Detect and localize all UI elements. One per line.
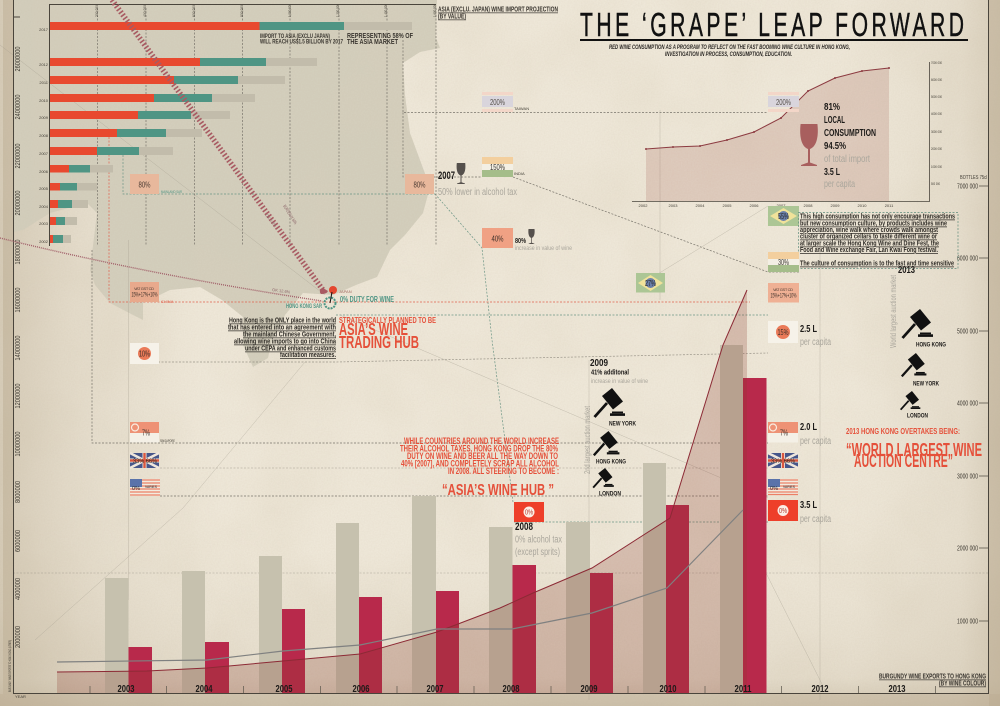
left axis labels: 8000000 (15, 481, 22, 503)
left axis labels: 26000000 (15, 46, 22, 72)
chart caption: Burgundy wine exports (879, 674, 986, 688)
flag: Hong Kong 2008 (514, 502, 544, 522)
chart: local consumption area: 2000 000 (931, 146, 943, 151)
chart: Asia wine import projection bars: 200,000 (94, 4, 99, 17)
bottom chart: Burgundy wine exports: 2007 (426, 683, 444, 695)
flag: Taiwan 200% left: TAIWAN (514, 106, 529, 111)
flag: USA right: VARIES (783, 484, 795, 489)
left axis labels: 6000000 (15, 530, 22, 552)
callout: 2009 additional increase: 41% additonal (591, 370, 629, 376)
chart: Asia wine import projection bars: 2010 (39, 98, 49, 103)
map of China coastline (14, 0, 440, 367)
text: countries increase alcohol taxes: 40% [2007], AND COMPLETELY SCRAP ALL ALCOHOL (401, 458, 559, 468)
Hong Kong marker: HONG KONG SAR (286, 304, 322, 310)
flag: Taiwan 200% right (768, 92, 799, 112)
chart: Asia wine import projection bars: 2005 (39, 186, 49, 191)
subtitle: INVESTIGATION IN PROCESS, CONSUMPTION, EDUCATION. (665, 51, 792, 58)
text: Hong Kong CEPA agreement: under CEPA and enhanced customs (245, 344, 336, 352)
flag: Hong Kong 80% right (405, 174, 434, 194)
flag: Singapore right with 2.0 L per capita (768, 421, 831, 447)
gavels 2013 ranking: LONDON (907, 412, 928, 420)
gavels 2013 ranking: HONG KONG (916, 342, 946, 348)
left axis labels: 10000000 (15, 431, 22, 456)
right axis labels (957, 175, 988, 626)
local consumption stats: 81% (824, 101, 841, 113)
flag: Brazil 27%: 27% (645, 279, 656, 288)
chart annotation: import to Asia: REPRESENTING 58% OF (347, 31, 413, 40)
flag: Japan 10% (130, 343, 159, 364)
flag: India 150%: INDIA (514, 171, 525, 176)
flag: Hong Kong 80% right: 80% (414, 180, 426, 190)
callout: 2013 year: 2013 (898, 264, 915, 276)
flag: China taxes left: 15%+17%+10% (132, 292, 158, 298)
local consumption stats: 94.5% (824, 140, 846, 152)
chart heading: wine import projection: ASIA (EXCLU. JAPAN) WINE IMPORT PROJECTION (438, 6, 558, 14)
left axis labels: YEAR (15, 694, 26, 699)
bottom chart: Burgundy wine exports (57, 290, 936, 695)
bottom chart: Burgundy wine exports: 2006 (352, 683, 370, 695)
flag: UK left (130, 453, 159, 468)
gavels 2013 ranking: NEW YORK (913, 380, 939, 388)
Hong Kong marker: JAPAN (339, 289, 352, 294)
right axis labels: 1000 000 (957, 618, 978, 626)
right axis labels: BOTTLES 75cl (960, 175, 987, 181)
right axis labels: 4000 000 (957, 400, 978, 408)
left axis labels: 12000000 (15, 383, 22, 408)
label: world largest auction market: World largest auction market (888, 275, 898, 348)
callout: 2008 zero alcohol tax (515, 521, 562, 558)
bottom chart: Burgundy wine exports: 2013 (888, 683, 906, 695)
gavels 2009 ranking (593, 388, 636, 498)
flag: USA left: 0% (132, 486, 140, 492)
flag: Japan 10%: 10% (139, 350, 150, 358)
flag: Brazil 55% (768, 206, 799, 226)
chart: Asia wine import projection bars: 2004 (39, 204, 49, 209)
flag: Japan 15% with 2.5 L per capita: 15% (778, 328, 788, 337)
text: countries increase alcohol taxes: IN 2008. ALL STEERING TO BECOME : (448, 466, 559, 476)
chart: local consumption area: 2005 (723, 203, 732, 208)
left axis labels (7, 46, 26, 699)
chart: Asia wine import projection bars: 2009 (39, 115, 49, 120)
heading: Asia's wine trading hub (339, 315, 436, 352)
chart annotation: import to Asia: THE ASIA MARKET (347, 37, 398, 46)
heading: Asia's wine trading hub: STRATEGICALLY PLANNED TO BE (339, 315, 436, 325)
flag: Japan 15% with 2.5 L per capita (768, 321, 831, 348)
left axis labels: 14000000 (15, 335, 22, 360)
chart: Asia wine import projection bars: 2002 (39, 239, 49, 244)
flag: Taiwan 200% left (482, 92, 529, 112)
chart: local consumption area: 2002 (639, 203, 648, 208)
bottom chart: Burgundy wine exports: 2003 (118, 683, 135, 695)
callout: 80% increase in value of wine: increase in value of wine (515, 245, 572, 252)
chart: local consumption area: 6000 000 (931, 77, 943, 82)
gavels 2009 ranking: LONDON (599, 490, 621, 498)
chart: local consumption area: 5000 000 (931, 94, 943, 99)
heading: Asia's wine trading hub: TRADING HUB (339, 332, 419, 352)
flag: 40%: 40% (492, 234, 504, 244)
chart: Asia wine import projection bars: 2007 (39, 151, 49, 156)
flag: Japan 15% with 2.5 L per capita: 2.5 L (800, 323, 817, 335)
flag: Hong Kong 0% with 3.5 L per capita (768, 499, 831, 525)
text box: consumption culture: Food and Wine exchange Fair, Lan Kwai Fong festival. (800, 245, 938, 254)
text: Hong Kong CEPA agreement: that has entered into an agreement with (228, 322, 336, 332)
local consumption stats: 3.5 L (824, 166, 840, 178)
subtitle (609, 44, 850, 58)
flag: India 150% (482, 157, 525, 177)
flag: UK right (768, 453, 798, 468)
flag: Hong Kong 2008: 0% (525, 510, 533, 516)
flag: Singapore left: SINGAPORE (160, 438, 175, 443)
flag: Singapore right with 2.0 L per capita: 7% (780, 428, 788, 438)
trade routes to Hong Kong: OK 12.6% (272, 287, 291, 295)
text box: consumption culture (798, 212, 958, 268)
gavels 2009 ranking: NEW YORK (609, 420, 636, 428)
gavels 2013 ranking (901, 309, 946, 420)
heading: world largest wine auction centre (846, 426, 982, 471)
callout: 2009 additional increase (590, 357, 648, 385)
trade routes to Hong Kong: OK 5.6% (264, 213, 278, 229)
chart: local consumption area: 4000 000 (931, 111, 943, 116)
right axis labels: 3000 000 (957, 474, 978, 480)
flag: Japan 15% with 2.5 L per capita: per capita (800, 337, 831, 348)
bottom chart: Burgundy wine exports: 2012 (812, 683, 829, 695)
chart: Asia wine import projection bars: 2008 (39, 133, 49, 138)
subtitle: RED WINE CONSUMPTION AS A PROGRAM TO REFLECT ON THE FAST BOOMING WINE CULTURE IN HONG KONG, (609, 44, 850, 51)
chart: local consumption area: 2003 (669, 203, 678, 208)
right axis labels: 7000 000 (957, 184, 978, 190)
flag: China taxes left: VAT GST CD (134, 286, 154, 291)
left axis labels: 22000000 (15, 143, 22, 168)
callout: 2007 lower alcohol tax: 50% lower in alcohol tax (438, 187, 517, 198)
flag: Brazil 27% (636, 273, 665, 292)
left axis labels: 18000000 (15, 239, 22, 264)
trade routes to Hong Kong (0, 0, 323, 301)
chart: Asia wine import projection bars: 2003 (39, 221, 49, 226)
bottom chart: Burgundy wine exports: 2009 (580, 683, 598, 695)
bottom chart: Burgundy wine exports: 2011 (734, 683, 752, 695)
bottom chart: Burgundy wine exports: 2008 (502, 683, 520, 695)
flag: India 30%: 30% (778, 258, 789, 267)
text: Hong Kong CEPA agreement: the mainland Chinese Government, (243, 330, 336, 338)
flag: Taiwan 200% right: 200% (776, 98, 791, 107)
chart: local consumption area: 500 000 (931, 181, 940, 186)
bottom chart: Burgundy wine exports: 2004 (196, 683, 213, 695)
local consumption stats: CONSUMPTION (824, 127, 876, 139)
flag: China taxes right: 15%+17%+10% (770, 294, 797, 300)
local consumption stats: of total import (824, 153, 870, 165)
flag: Hong Kong 0% with 3.5 L per capita: 0% (779, 508, 787, 515)
left axis labels: 24000000 (15, 94, 22, 120)
flag: Hong Kong 80% left: 80% (138, 180, 150, 190)
flag: Hong Kong 0% with 3.5 L per capita: per capita (800, 514, 831, 525)
trade routes to Hong Kong: BORDEAUX 60% (282, 204, 298, 225)
right axis labels: 6000 000 (957, 256, 978, 262)
chart annotation: import to Asia: IMPORT TO ASIA (EXCLU JAPAN) (260, 34, 330, 40)
chart: local consumption area: 2004 (696, 203, 705, 208)
flag: Singapore left (130, 422, 175, 443)
label: 2nd largest auction market: 2nd largest auction market (582, 406, 592, 474)
callout: 2009 additional increase: 2009 (590, 357, 608, 369)
chart: Asia wine import projection bars: 2017 (39, 27, 49, 32)
chart: Asia wine import projection bars: 400,000 (142, 4, 147, 17)
chart annotation: import to Asia: WILL REACH US$1.5 BILLION BY 2017 (260, 40, 343, 46)
gavels 2009 ranking: HONG KONG (596, 458, 626, 466)
text: Hong Kong CEPA agreement: allowing wine imports to go into China (234, 336, 337, 346)
text box: consumption culture: appreciation, wine walk where crowds walk amongst (800, 225, 938, 234)
text: Hong Kong CEPA agreement: facilitation measures. (280, 350, 336, 359)
text: Hong Kong CEPA agreement (228, 316, 337, 359)
icon: red wine glass (800, 124, 818, 166)
callout: 2007 lower alcohol tax: 2007 (438, 170, 455, 182)
flag: UK left: 33% 66% (133, 458, 157, 465)
chart: Asia wine import projection bars: 2012 (39, 62, 49, 67)
chart: local consumption area: 1000 000 (931, 164, 943, 169)
chart heading: wine import projection: (BY VALUE) (438, 14, 466, 20)
bottom chart: Burgundy wine exports: 2005 (276, 683, 293, 695)
chart: Asia wine import projection bars: 800,000 (239, 4, 244, 17)
flag: Hong Kong 80% left (130, 174, 182, 194)
flag: 40% (482, 228, 513, 248)
chart: local consumption area: 2006 (750, 203, 759, 208)
flag: Singapore right with 2.0 L per capita: per capita (800, 436, 831, 447)
left axis labels: 2000000 (15, 626, 22, 648)
flag: India 30% (768, 252, 799, 272)
left axis labels: BURGUNDY WINE EXPORTS TO HONG KONG (LITRES) (7, 640, 12, 692)
right axis labels: 5000 000 (957, 328, 978, 336)
callout: 2007 lower alcohol tax (438, 163, 517, 198)
chart: local consumption area: 7000 000 (931, 60, 943, 65)
chart: Asia wine import projection bars (39, 3, 437, 246)
right axis labels: 2000 000 (957, 546, 978, 552)
flag: China taxes right (768, 283, 799, 302)
text: countries increase alcohol taxes: WHILE COUNTRIES AROUND THE WORLD INCREASE (404, 436, 559, 446)
callout: 2009 additional increase: increase in value of wine (591, 378, 648, 385)
chart: local consumption area: 2011 (885, 203, 894, 208)
bottom chart: Burgundy wine exports: 2010 (660, 683, 677, 695)
text: Hong Kong CEPA agreement: Hong Kong is the ONLY place in the world (229, 316, 336, 324)
text: countries increase alcohol taxes: THEIR ALCOHOL TAXES, HONG KONG DROP THE 80% (400, 444, 558, 454)
left axis labels: 16000000 (15, 287, 22, 312)
callout: 2008 zero alcohol tax: 0% alcohol tax (515, 534, 562, 546)
callout: 80% increase in value of wine (515, 229, 572, 252)
chart: local consumption area: 2007 (777, 203, 786, 208)
chart heading: wine import projection (438, 6, 558, 20)
chart: Asia wine import projection bars: 2011 (39, 80, 49, 85)
flag: USA right: 0% (770, 486, 778, 492)
flag: Singapore right with 2.0 L per capita: 2.0 L (800, 421, 817, 433)
flag: USA right (768, 479, 798, 495)
heading: Asia's wine hub: “ASIA’S WINE HUB ” (442, 482, 554, 499)
flag: China taxes right: VAT GST CD (773, 287, 793, 292)
heading: Asia's wine trading hub: ASIA’S WINE (339, 319, 408, 339)
flag: China taxes left: CHINA (161, 299, 174, 304)
left axis labels: 4000000 (15, 578, 22, 600)
text: countries increase alcohol taxes (400, 436, 559, 476)
local consumption stats: per capita (824, 178, 855, 190)
flag: China taxes left (130, 282, 174, 304)
chart: local consumption area: 3000 000 (931, 129, 943, 134)
flag: UK right: 33% 66% (771, 458, 795, 465)
callout: 2008 zero alcohol tax: 2008 (515, 521, 533, 533)
chart: local consumption area: 2008 (804, 203, 813, 208)
flag: Hong Kong 0% with 3.5 L per capita: 3.5 L (800, 499, 817, 511)
callout: 80% increase in value of wine: 80% (515, 236, 526, 245)
text box: consumption culture: at larger scale the Hong Kong Wine and Dine Fest, the (800, 238, 939, 248)
local consumption stats (824, 101, 876, 190)
callout: 2008 zero alcohol tax: (except sprits) (515, 547, 560, 558)
text box: consumption culture: cluster of organized cellars to taste different wine or (800, 232, 937, 240)
flag: Singapore left: 7% (142, 428, 150, 438)
chart: Asia wine import projection bars: 2006 (39, 169, 49, 174)
flag: Brazil 55%: 55% (778, 212, 789, 221)
Hong Kong marker (286, 286, 394, 310)
Hong Kong marker: 0% DUTY FOR WINE (340, 295, 394, 304)
local consumption stats: LOCAL (824, 114, 845, 126)
title: THE ‘GRAPE’ LEAP FORWARD (580, 6, 964, 43)
text: countries increase alcohol taxes: DUTY ON WINE AND BEER ALL THE WAY DOWN TO (407, 451, 558, 461)
chart: local consumption area: 2009 (831, 203, 840, 208)
flag: USA left: VARIES (145, 484, 157, 489)
text box: consumption culture: but new consumption culture, by products includes wine (800, 218, 947, 228)
chart annotation: import to Asia (260, 31, 413, 46)
flag: Taiwan 200% left: 200% (490, 98, 505, 107)
flag: Hong Kong 80% left: MAINLAND SAR (161, 189, 182, 194)
chart: local consumption area (632, 60, 943, 208)
chart: Asia wine import projection bars: 600,000 (191, 4, 196, 17)
flag: USA left (130, 479, 160, 496)
chart: local consumption area: 2010 (858, 203, 867, 208)
left axis labels: 20000000 (15, 190, 22, 216)
flag: India 150%: 150% (490, 163, 505, 172)
